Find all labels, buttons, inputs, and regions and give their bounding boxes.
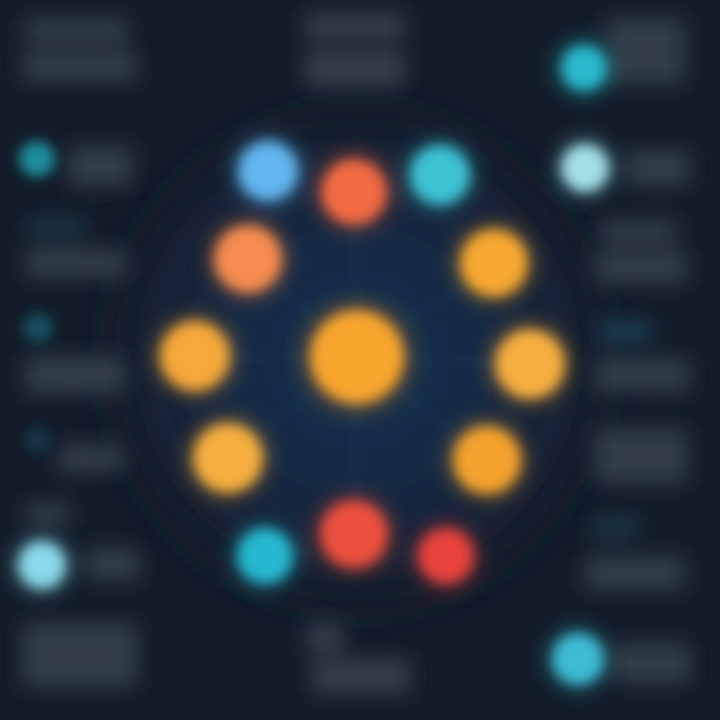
icon: left dim dot 2 — [25, 427, 51, 453]
text block: left label 1 — [68, 146, 133, 186]
node: orange upper right — [461, 230, 527, 296]
node: orange right — [496, 330, 564, 398]
text block: top right — [605, 18, 685, 84]
left column text blocks — [22, 18, 140, 687]
node: teal top — [411, 146, 469, 204]
icon: left dim dot 1 — [23, 313, 53, 343]
connection rings — [153, 153, 563, 563]
text block: right label 4 — [595, 428, 687, 484]
text block: bottom right — [612, 643, 690, 683]
node: red bottom — [321, 501, 387, 567]
text block: right label 2 — [595, 220, 687, 284]
side icons — [19, 46, 608, 684]
top and bottom centre text blocks — [305, 12, 410, 694]
node: centre hub — [311, 311, 403, 403]
icon: bottom right teal dot — [553, 634, 603, 684]
icon: left teal dot — [19, 141, 55, 177]
text block: top left — [22, 18, 137, 82]
icon: left pale dot — [19, 542, 65, 588]
text block: bottom centre — [305, 623, 410, 694]
right column text blocks — [585, 18, 690, 683]
node: orange lower right — [454, 427, 520, 493]
text block: top centre — [305, 12, 405, 88]
text block: right label 3 — [595, 320, 690, 392]
text block: left label 4 — [58, 444, 123, 472]
text block: left label 5 — [25, 503, 140, 580]
icon: right pale dot — [562, 145, 608, 191]
node: red lower right — [419, 529, 473, 583]
node: orange lower left — [194, 424, 262, 492]
icon: top right teal dot — [562, 46, 606, 90]
node: red orange top — [322, 160, 386, 224]
node: blue — [239, 142, 297, 200]
text block: left label 3 — [25, 356, 125, 394]
node: salmon — [215, 226, 281, 292]
central glow panel — [118, 120, 598, 600]
text block: left label 2 — [26, 218, 126, 278]
text block: bottom left — [22, 623, 137, 687]
text block: right label 5 — [585, 516, 685, 590]
text block: right label 1 — [625, 150, 690, 186]
network nodes — [161, 142, 564, 583]
node: teal bottom — [238, 529, 292, 583]
node: orange left — [161, 322, 229, 390]
node halos — [12, 38, 615, 691]
